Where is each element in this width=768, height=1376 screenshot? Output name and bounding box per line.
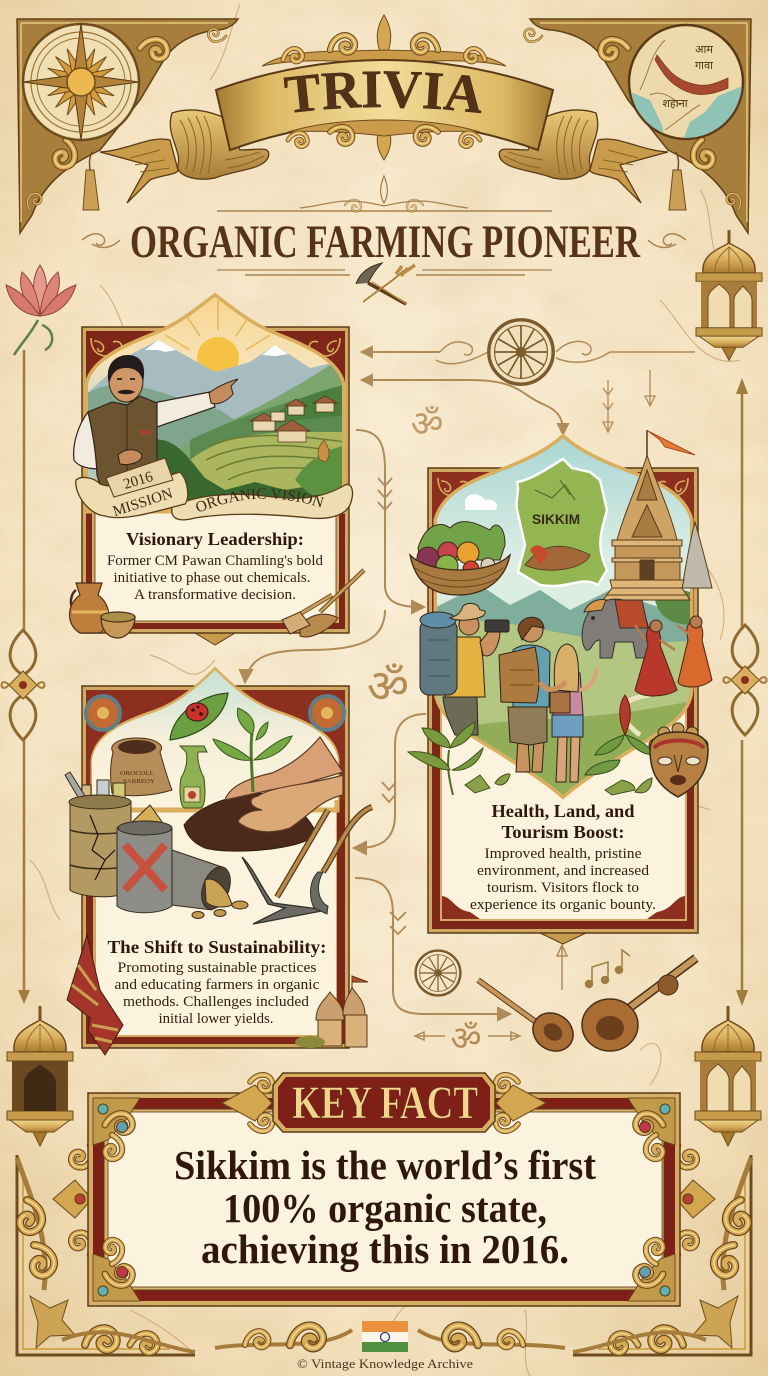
icon: chemical barrel cracked bbox=[65, 772, 131, 897]
ribbon: organic vision bbox=[171, 484, 354, 520]
scene: sky arch bbox=[85, 665, 345, 810]
icon: dancers bbox=[635, 616, 712, 696]
icon: tea plant bbox=[408, 722, 510, 795]
text: shift to sustainability bbox=[108, 937, 326, 1027]
text: health, land and tourism: tourism. Visitors flock to bbox=[487, 880, 639, 896]
icon: sideways barrel with spilled grain bbox=[172, 850, 248, 918]
ornament: corner bottom right with gems bbox=[628, 1239, 675, 1301]
heading: Organic Farming Pioneer bbox=[82, 176, 686, 304]
text: visionary leadership bbox=[107, 529, 324, 603]
icon: mandala corner right bbox=[310, 696, 344, 730]
ribbon label 2016: 2016 bbox=[122, 469, 155, 493]
icon: music notes bbox=[586, 950, 630, 988]
icon: large sitar bbox=[582, 958, 696, 1051]
text: health, land and tourism: Tourism Boost: bbox=[502, 822, 624, 842]
text: health, land and tourism: experience its organic bounty. bbox=[470, 897, 656, 913]
icon: seedling in soil held by hands bbox=[184, 708, 343, 851]
text: visionary leadership: Visionary Leadership: bbox=[126, 529, 304, 549]
left vertical arrow with ornament bbox=[2, 350, 44, 1004]
bottom left corner ornament bbox=[15, 1155, 195, 1357]
panel: health, land and tourism boost bbox=[408, 430, 712, 944]
icon: grey barrel with red cross bbox=[117, 805, 172, 913]
top right corner ornament with map bbox=[524, 19, 751, 233]
figure: tourist couple bbox=[499, 617, 597, 782]
icon: om symbol middle: ॐ bbox=[367, 660, 409, 712]
text: health, land and tourism: Health, Land, and bbox=[492, 801, 634, 821]
ornament: corner top left with gems bbox=[93, 1098, 140, 1160]
footer credit: © Vintage Knowledge Archive bbox=[297, 1357, 473, 1371]
key fact statement: Sikkim is the world’s first bbox=[174, 1142, 596, 1188]
panel: visionary leadership bbox=[68, 292, 366, 646]
figure: tourist with camera bbox=[420, 603, 509, 735]
icon: red ginger and leaves bbox=[585, 695, 655, 795]
scene arch: Sikkim landscape bbox=[430, 435, 695, 800]
flourish above ribbon bbox=[262, 15, 506, 67]
title ribbon: Trivia bbox=[82, 14, 687, 210]
title: TRIVIA: TRIVIA bbox=[284, 71, 482, 114]
key fact statement bbox=[174, 1142, 596, 1272]
icon: organic fertiliser sack: SARREOY bbox=[123, 778, 155, 785]
key fact statement: achieving this in 2016. bbox=[201, 1226, 569, 1272]
left ribbon tail and tassel bbox=[83, 110, 269, 210]
text: shift to sustainability: and educating farmers in organic bbox=[114, 977, 320, 993]
icon: Sikkim green map bbox=[517, 459, 607, 586]
icon: organic fertiliser sack: OROCOLL bbox=[120, 770, 154, 777]
plaque: key fact label bbox=[222, 1073, 546, 1132]
ornament: corner top right with gems bbox=[628, 1098, 675, 1160]
panel: key fact bbox=[53, 1073, 715, 1306]
icon: compass rose bbox=[23, 24, 139, 140]
ribbon: 2016 mission bbox=[76, 458, 188, 520]
bottom scrollwork beside flag bbox=[215, 1321, 565, 1357]
ornament: right side medallion bbox=[671, 1140, 715, 1260]
ribbon: organic vision: ORGANIC VISION bbox=[196, 488, 324, 512]
icon: pickaxe and wheat bbox=[356, 263, 415, 304]
text: shift to sustainability: Promoting sustainable practices bbox=[118, 960, 317, 976]
ribbon main arch bbox=[216, 60, 553, 150]
ornament: left side medallion bbox=[53, 1140, 97, 1260]
icon: vegetable basket bbox=[410, 522, 510, 595]
text: health, land and tourism bbox=[470, 801, 656, 913]
icon: tribal mask bbox=[649, 723, 708, 797]
icon: map of India showing Sikkim: शहाना bbox=[662, 98, 688, 110]
icon: organic fertiliser sack bbox=[111, 738, 172, 796]
text: shift to sustainability: initial lower yields. bbox=[158, 1011, 274, 1027]
icon: map of India showing Sikkim: गावा bbox=[695, 60, 713, 72]
icon: elephant bbox=[582, 599, 648, 658]
icon: map of India showing Sikkim: आम bbox=[695, 44, 713, 56]
icon: spray bottle bbox=[180, 746, 207, 808]
icon: garden hoe and pickaxe bbox=[242, 807, 372, 924]
icon: clay jug and bowl bbox=[70, 583, 135, 638]
text: visionary leadership: Former CM Pawan Chamling's bold bbox=[107, 553, 324, 569]
icon: small wheel bbox=[416, 951, 460, 995]
map label: Sikkim: SIKKIM bbox=[532, 512, 580, 527]
text: health, land and tourism: environment, and increased bbox=[477, 863, 650, 879]
icon: map of India showing Sikkim bbox=[629, 25, 745, 140]
lantern bottom right bbox=[695, 1006, 761, 1146]
text: visionary leadership: initiative to phase out chemicals. bbox=[114, 570, 310, 586]
icon: woven textile bbox=[67, 935, 123, 1055]
panel: the shift to sustainability bbox=[65, 665, 372, 1055]
text: shift to sustainability: methods. Challenges included bbox=[123, 994, 310, 1010]
flourish below ribbon bbox=[287, 120, 481, 160]
plaque text: KEY FACT bbox=[292, 1077, 478, 1129]
icon: mandala corner left bbox=[86, 696, 120, 730]
scene: mountains, terraces and leader bbox=[74, 295, 345, 525]
figure: Pawan Chamling pointing bbox=[74, 355, 238, 500]
icon: chakra wheel bbox=[489, 320, 553, 384]
ribbon label mission: MISSION bbox=[111, 486, 175, 520]
text: shift to sustainability: The Shift to Sustainability: bbox=[108, 937, 326, 957]
icon: small temple bbox=[295, 976, 368, 1048]
lantern top right bbox=[696, 230, 762, 360]
icon: temple with flag bbox=[603, 430, 712, 600]
key fact statement: 100% organic state, bbox=[223, 1185, 547, 1231]
icon: om symbol top: ॐ bbox=[411, 403, 443, 444]
icon: ladybug on leaf bbox=[170, 693, 228, 740]
right ribbon tail and tassel bbox=[499, 110, 686, 210]
icon: flag of India bbox=[362, 1321, 408, 1352]
connector arrows and wheel bbox=[240, 341, 695, 1040]
top left corner ornament with compass bbox=[17, 19, 238, 233]
icon: om symbol bottom: ॐ bbox=[450, 1020, 482, 1058]
icon: wooden plough bbox=[282, 570, 364, 637]
icon: small veena bbox=[478, 980, 581, 1059]
icon: lotus with stem bbox=[6, 265, 76, 355]
text: health, land and tourism: Improved health, pristine bbox=[484, 846, 642, 862]
bottom right corner ornament bbox=[573, 1155, 753, 1357]
ornament: corner bottom left with gems bbox=[93, 1239, 140, 1301]
right vertical arrow with ornament bbox=[724, 378, 766, 1006]
lantern bottom left bbox=[7, 1006, 73, 1146]
text: visionary leadership: A transformative decision. bbox=[134, 587, 296, 603]
